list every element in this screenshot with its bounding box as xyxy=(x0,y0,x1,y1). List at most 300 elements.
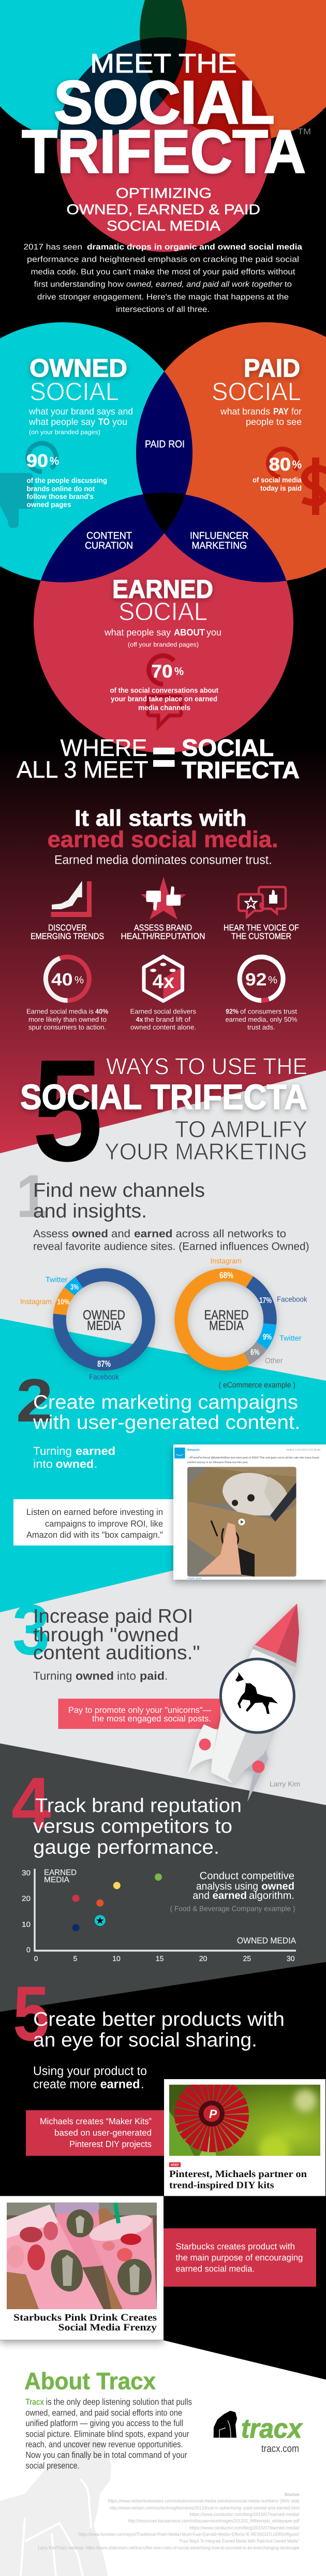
about tracx paragraph: unified platform — giving you access to the full xyxy=(25,2418,183,2428)
donut chart: owned media: OWNED xyxy=(83,1308,125,1322)
sources: https://www.conductor.com/blog/2015/07/earned-media/ xyxy=(189,2525,300,2530)
stat 90 percent: owned pages xyxy=(27,500,71,509)
callout: pay to promote unicorns: Pay to promote only your "unicorns"— xyxy=(68,1706,211,1715)
heading: it all starts with earned social media xyxy=(48,806,278,867)
caption xyxy=(226,1007,298,1031)
chart note: analysis using xyxy=(196,1881,258,1892)
photo: starbucks drinks xyxy=(7,2202,157,2309)
overlap label: influencer marketing: INFLUENCER xyxy=(190,531,248,541)
heading paid social xyxy=(212,354,301,406)
tracx logo xyxy=(214,2411,303,2455)
step 3 heading: content auditions." xyxy=(33,1642,200,1664)
tweet text: Unpin post xyxy=(187,1577,202,1580)
stat 70 percent: your brand take place on earned xyxy=(111,695,217,703)
x axis tick labels: 5 xyxy=(73,1954,78,1963)
chart note: earned xyxy=(213,1890,247,1901)
step 2 heading xyxy=(16,1367,300,1435)
heading: 5 ways to use the social trifecta: SOCIAL TRIFECTA xyxy=(20,1078,307,1117)
donut chart: owned media: MEDIA xyxy=(87,1319,121,1333)
intro paragraph: media code. But you can't make the most of your paid efforts without xyxy=(31,267,295,276)
x axis tick labels: 15 xyxy=(156,1954,164,1963)
step 2 subheading: . xyxy=(94,1457,97,1470)
donut chart: earned media: Other xyxy=(265,1357,283,1365)
donut chart: earned media: 9% xyxy=(263,1333,272,1342)
earned definition: ABOUT xyxy=(174,627,205,637)
x axis tick labels: 20 xyxy=(199,1954,207,1963)
panel: earned social xyxy=(104,575,221,726)
overlap label: influencer marketing xyxy=(190,531,248,551)
callout: listen on earned xyxy=(13,1499,173,1545)
step 3 subheading xyxy=(33,1669,168,1682)
tweet card: amazon box campaign xyxy=(173,1444,326,1580)
ring 92 percent: % xyxy=(268,975,277,986)
intro paragraph: dramatic drops in organic and owned social media xyxy=(87,242,302,251)
title xyxy=(22,49,311,186)
where all 3 meet equation: TRIFECTA xyxy=(182,756,300,783)
intro paragraph: first understanding how xyxy=(34,280,124,289)
sources: Sources xyxy=(285,2492,300,2497)
step 2 subheading: Turning xyxy=(33,1444,72,1457)
intro paragraph: intersections of all three. xyxy=(116,305,210,314)
tweet text: Amazon xyxy=(187,1448,200,1452)
rocket illustration xyxy=(188,1604,299,1802)
stat 70 percent: of the social conversations about xyxy=(110,686,218,694)
ring 40 percent xyxy=(46,957,89,1000)
caption: spur consumers to action. xyxy=(28,1023,106,1031)
photo: cat in amazon box xyxy=(187,1467,297,1577)
photo: pinterest flower: P xyxy=(209,2107,217,2121)
x axis tick labels: 30 xyxy=(287,1954,295,1963)
stat 90 percent: of the people discussing xyxy=(27,476,107,484)
step 4 heading xyxy=(11,1762,242,1858)
tracx logo: tracx xyxy=(241,2414,303,2444)
step 1 description: across all networks to xyxy=(176,1228,286,1240)
step 5 subheading: Using your product to xyxy=(33,2064,147,2078)
panel: hear the voice of the customer xyxy=(224,887,299,1031)
article headline: trend-inspired DIY kits xyxy=(169,2180,274,2191)
paid definition xyxy=(220,406,302,427)
step 5 heading: Create better products with xyxy=(33,2009,285,2030)
icon: speech bubbles xyxy=(239,887,286,917)
overlap label: content curation: CONTENT xyxy=(86,531,132,541)
axis titles xyxy=(44,1868,296,1945)
about tracx paragraph xyxy=(25,2397,192,2470)
paid definition: people to see xyxy=(246,417,302,427)
article card: starbucks pink drink xyxy=(0,2196,164,2340)
venn diagram xyxy=(0,322,326,753)
title: MEET THE xyxy=(90,49,237,79)
callout: michaels maker kits: based on user-generated xyxy=(54,2128,152,2138)
heading earned social xyxy=(112,575,213,626)
subtitle: SOCIAL MEDIA xyxy=(107,218,221,234)
overlap label: paid roi: PAID ROI xyxy=(145,439,185,450)
chart note xyxy=(170,1870,295,1913)
sources: http://www.nielsen.com/us/en/insights/news/2012/trust-in-advertising--paid-owned-and-earned.html xyxy=(110,2505,300,2510)
stat 80 percent: % xyxy=(292,458,302,471)
heading paid social: SOCIAL xyxy=(212,378,301,406)
heading owned social: SOCIAL xyxy=(30,378,119,406)
donut chart: owned media xyxy=(20,1275,149,1381)
callout: pay to promote unicorns: the most engaged social posts. xyxy=(92,1714,211,1723)
callout: starbucks: Starbucks creates product with xyxy=(176,2241,295,2251)
stat 70 percent: 70 xyxy=(151,661,173,682)
step 3 heading xyxy=(12,1590,200,1670)
caption: Earned social media is xyxy=(26,1007,94,1015)
subtitle xyxy=(66,185,260,234)
label: HEALTH/REPUTATION xyxy=(121,932,205,941)
donut chart: owned media: 3% xyxy=(70,1283,79,1292)
callout: michaels maker kits: Michaels creates “Maker Kits” xyxy=(40,2116,152,2126)
caption: 92% xyxy=(226,1007,239,1015)
step 1 description: earned xyxy=(134,1228,173,1240)
caption xyxy=(130,1007,196,1031)
step 5 heading: an eye for social sharing. xyxy=(33,2029,257,2051)
icon: thumbs down xyxy=(0,473,34,528)
stat 80 percent: today is paid xyxy=(260,484,302,492)
chart note: algorithm. xyxy=(249,1890,294,1901)
earned definition xyxy=(104,627,221,648)
step 3 subheading: . xyxy=(165,1669,168,1682)
owned definition xyxy=(28,406,133,436)
intro paragraph xyxy=(23,242,302,314)
y axis tick labels: 0 xyxy=(26,1945,31,1954)
donut chart: earned media: 17% xyxy=(259,1296,272,1305)
step 1 description xyxy=(33,1228,309,1253)
ring 40 percent: % xyxy=(75,975,84,986)
caption: trust ads. xyxy=(247,1023,275,1031)
tweet text: Verified 12-03-2016 10:32:28 AM xyxy=(286,1449,320,1452)
about tracx paragraph: Tracx xyxy=(25,2397,44,2407)
where all 3 meet equation: ALL 3 MEET xyxy=(17,756,148,783)
paid definition: for xyxy=(291,406,302,417)
x axis tick labels xyxy=(34,1954,295,1963)
step 4 heading: 4 xyxy=(11,1762,51,1843)
label: DISCOVER xyxy=(48,923,87,933)
tweet text: comfort and joy in an #Amazon Prime box this year. xyxy=(187,1461,248,1464)
title: TM xyxy=(298,127,311,136)
label: THE CUSTOMER xyxy=(231,932,291,941)
heading: 5 ways to use the social trifecta: TO AMPLIFY xyxy=(175,1116,307,1142)
label xyxy=(224,923,299,941)
heading earned social: EARNED xyxy=(112,575,213,604)
icon: speech bubble xyxy=(148,696,181,726)
article headline xyxy=(13,2312,157,2333)
callout: listen on earned: campaigns to improve ROI, like xyxy=(45,1519,163,1528)
y axis tick labels xyxy=(22,1869,31,1954)
label: brief tag xyxy=(169,2163,181,2167)
caption: the brand lift of xyxy=(144,1015,190,1023)
owned definition: you xyxy=(112,417,127,427)
donut chart: earned media: EARNED xyxy=(204,1308,248,1322)
hexagon die 4x xyxy=(144,956,182,1001)
background black section lower xyxy=(0,1962,326,2380)
icon: unicorn xyxy=(235,1672,278,1714)
caption: 4x xyxy=(136,1015,143,1023)
venn circles and overlaps xyxy=(0,322,326,753)
step 5 subheading: create more xyxy=(33,2078,97,2092)
step 3 heading: Increase paid ROI xyxy=(33,1606,193,1627)
step 5 subheading: earned xyxy=(100,2078,140,2092)
ring 40 percent: 40 xyxy=(51,970,73,990)
callout: pay to promote unicorns xyxy=(58,1699,220,1729)
step 2 subheading: owned xyxy=(56,1457,94,1470)
label: brief tag: BRIEF xyxy=(171,2164,179,2167)
callout: listen on earned: Amazon did with its "box campaign." xyxy=(26,1530,163,1540)
porthole xyxy=(220,1659,294,1733)
label: EMERGING TRENDS xyxy=(31,932,104,941)
photo: pinterest flower xyxy=(169,2085,320,2156)
intro paragraph: to xyxy=(285,280,292,289)
overlap label: influencer marketing: MARKETING xyxy=(191,540,247,551)
step 1 heading: 1 xyxy=(16,1162,49,1230)
scatter chart xyxy=(22,1868,296,1963)
icon: gorilla xyxy=(214,2411,237,2438)
ring 92 percent: 92 xyxy=(245,970,267,990)
header venn circles xyxy=(0,0,326,252)
callout: starbucks: the main purpose of encouraging xyxy=(176,2253,303,2263)
subtitle: OWNED, EARNED & PAID xyxy=(66,202,260,218)
heading owned social xyxy=(29,354,127,406)
intro paragraph: owned, earned, and paid all work together xyxy=(126,280,283,289)
owned definition: what people say xyxy=(28,417,95,427)
article headline: Starbucks Pink Drink Creates xyxy=(13,2312,157,2323)
heading: 5 ways to use the social trifecta: YOUR MARKETING xyxy=(105,1138,307,1165)
earned definition: (off your branded pages) xyxy=(128,641,199,648)
donut chart: earned media: 68% xyxy=(219,1270,233,1280)
amazon logo xyxy=(174,1448,185,1458)
label: ASSESS BRAND xyxy=(134,923,192,933)
step 1 description: reveal favorite audience sites. (Earned influences Owned) xyxy=(33,1240,309,1253)
donut chart: earned media: Instagram xyxy=(210,1257,242,1266)
step 2 heading: Create marketing campaigns xyxy=(33,1392,298,1413)
article card: pinterest michaels xyxy=(164,2079,325,2196)
donut chart: earned media xyxy=(181,1257,307,1365)
chart note: owned xyxy=(261,1881,294,1892)
heading owned social: OWNED xyxy=(29,354,127,382)
background dark section xyxy=(0,1743,326,2012)
owned definition: what your brand says and xyxy=(28,406,133,417)
70 percent ring xyxy=(149,656,174,684)
step 3 heading: through "owned xyxy=(33,1624,179,1646)
data points xyxy=(72,1873,162,1931)
donut chart: owned media: Twitter xyxy=(46,1276,68,1284)
axis titles: MEDIA xyxy=(44,1876,70,1884)
where all 3 meet equation: SOCIAL xyxy=(182,734,274,761)
heading: 5 ways to use the social trifecta: WAYS TO USE THE xyxy=(106,1053,307,1080)
about tracx paragraph: reach, and uncover new revenue opportunities. xyxy=(25,2439,183,2449)
chart note: Conduct competitive xyxy=(200,1870,294,1882)
paid definition: what brands xyxy=(220,406,270,417)
heading earned social: SOCIAL xyxy=(118,598,208,626)
caption: earned media, only 50% xyxy=(226,1015,298,1023)
step 1 description: owned xyxy=(72,1228,108,1240)
donut chart: owned media: Facebook xyxy=(89,1373,120,1381)
step 5 heading xyxy=(13,1970,285,2057)
step 1 heading xyxy=(16,1162,205,1230)
caption: 40% xyxy=(95,1007,109,1015)
heading: it all starts with earned social media: It all starts with xyxy=(75,806,246,831)
sources xyxy=(38,2492,300,2550)
step 5 subheading xyxy=(33,2064,147,2092)
caption: more likely than owned to xyxy=(28,1015,107,1023)
background teal section xyxy=(0,1319,326,1612)
x axis tick labels: 0 xyxy=(34,1954,38,1963)
step 1 heading: and insights. xyxy=(33,1200,147,1222)
caption xyxy=(26,1007,109,1031)
ring 92 percent xyxy=(240,957,283,1000)
stat 90 percent: 90 xyxy=(26,451,48,471)
step 3 subheading: into xyxy=(117,1669,136,1682)
fin dots xyxy=(199,1739,211,1750)
callout: listen on earned: Listen on earned before investing in xyxy=(26,1507,163,1517)
step 5 subheading: . xyxy=(141,2078,144,2092)
credit: larry kim: Larry Kim xyxy=(270,1780,300,1788)
where all 3 meet equation xyxy=(17,734,300,783)
donut chart: earned media: Facebook xyxy=(277,1295,307,1304)
panel: owned social xyxy=(0,354,133,528)
article headline: Pinterest, Michaels partner on xyxy=(169,2169,307,2180)
earned definition: you xyxy=(206,627,221,637)
sources: https://www.networknewswire.com/solutions/social-media-solutions/social-media-numbers/ (96% stat) xyxy=(108,2498,299,2503)
callout: starbucks: earned social media. xyxy=(176,2264,255,2273)
axis titles: OWNED MEDIA xyxy=(237,1936,296,1945)
overlap label: content curation: CURATION xyxy=(85,540,133,551)
step 2 subheading: earned xyxy=(76,1444,115,1457)
gorilla watermark xyxy=(0,2437,111,2576)
step 3 subheading: Turning xyxy=(33,1669,72,1682)
sources: "Four Ways To Integrate Earned Media With Paid And Owned Media" xyxy=(179,2539,299,2544)
step 3 subheading: paid xyxy=(140,1669,165,1682)
step 3 subheading: owned xyxy=(76,1669,114,1682)
stat 70 percent xyxy=(110,661,218,712)
where all 3 meet equation: WHERE xyxy=(60,734,147,761)
stat 70 percent: media channels xyxy=(138,704,190,712)
stat 80 percent: of social media xyxy=(253,476,302,484)
heading: it all starts with earned social media: earned social media. xyxy=(48,827,278,852)
big numeral 5: 5 xyxy=(32,1030,103,1192)
step 4 heading: Track brand reputation xyxy=(35,1795,242,1816)
about tracx paragraph: social presence. xyxy=(25,2460,80,2470)
tracx logo: tracx.com xyxy=(261,2443,299,2455)
panel: paid social xyxy=(212,354,326,515)
x axis tick labels: 10 xyxy=(112,1954,121,1963)
about tracx paragraph: Now you can finally be in total command of your xyxy=(25,2450,187,2460)
article headline xyxy=(169,2169,307,2191)
chart note: and xyxy=(192,1890,210,1901)
step 2 heading: 2 xyxy=(16,1367,53,1435)
heading: it all starts with earned social media: Earned media dominates consumer trust. xyxy=(54,853,272,867)
about tracx paragraph: social picture. Eliminate blind spots, expand your xyxy=(25,2429,189,2439)
step 2 heading: with user-generated content. xyxy=(33,1412,300,1434)
sources: https://www.forrester.com/report/Traditional+Paid+Media+Must+Fuel+Earned+Media+Efforts/-/E-RES60337LUDRG#figure2 xyxy=(79,2532,300,2537)
heading: 5 ways to use the social trifecta xyxy=(20,1030,307,1192)
owned definition: (on your branded pages) xyxy=(29,428,100,436)
intro paragraph: drive stronger engagement. Here's the magic that happens at the xyxy=(37,293,289,302)
90 percent ring xyxy=(28,443,56,471)
title: TRIFECTA xyxy=(22,118,306,186)
article headline: Social Media Frenzy xyxy=(58,2322,157,2333)
background gradient maroon section xyxy=(0,746,326,1161)
about tracx paragraph: is the only deep listening solution that pulls xyxy=(46,2397,192,2407)
step 5 heading: 5 xyxy=(13,1970,50,2057)
sources: https://www.conductor.com/blog/2015/07/earned-media/ xyxy=(189,2512,300,2517)
icon: dollar sign xyxy=(303,457,326,515)
80 percent ring xyxy=(268,449,297,477)
icon: star with thumbs xyxy=(141,877,186,920)
earned definition: what people say xyxy=(104,627,171,637)
step 2 subheading: into xyxy=(33,1457,53,1470)
stat 80 percent xyxy=(253,454,302,492)
tweet text: ...#PrimePet friend @butterfoldhas won best post of 2016! This one goes out to all the cats who have found xyxy=(187,1456,319,1459)
subtitle: OPTIMIZING xyxy=(116,185,212,201)
icon: trend chart xyxy=(51,881,92,917)
overlap label: content curation xyxy=(85,531,133,551)
intro paragraph: performance and heightened emphasis on cracking the paid social xyxy=(27,255,299,264)
icon: thumb in bubble xyxy=(269,890,277,904)
paid definition: PAY xyxy=(273,406,289,417)
callout: michaels maker kits: Pinterest DIY projects xyxy=(69,2139,152,2149)
step 1 description: Assess xyxy=(33,1228,69,1240)
tweet text xyxy=(187,1448,320,1580)
step 4 heading: versus competitors to xyxy=(33,1815,232,1837)
ecommerce example note: ( eCommerce example ) xyxy=(219,1381,295,1390)
axis titles: EARNED xyxy=(44,1868,77,1877)
donut chart: earned media: MEDIA xyxy=(209,1319,244,1333)
panel: discover emerging trends xyxy=(26,881,109,1031)
step 1 description: and xyxy=(111,1228,130,1240)
step 2 subheading xyxy=(33,1444,115,1470)
donut chart: owned media: Instagram xyxy=(20,1298,52,1306)
step 4 heading: gauge performance. xyxy=(33,1837,219,1858)
y axis tick labels: 30 xyxy=(22,1869,31,1877)
donut chart: owned media: 87% xyxy=(97,1359,111,1369)
caption: Earned social delivers xyxy=(130,1007,196,1015)
sources: Larry Kim/Tracx webinar: https://www.slideshare.net/tracx/the-new-rules-of-social-advertising-how-to-succeed-in-an-everchanging-landscape xyxy=(38,2545,299,2550)
callout: michaels maker kits xyxy=(26,2110,164,2156)
caption: owned content alone. xyxy=(130,1023,196,1031)
about tracx heading: About Tracx xyxy=(24,2368,156,2395)
background light gray section lower xyxy=(0,1534,326,1808)
about tracx paragraph: owned, earned, and paid social efforts into one xyxy=(25,2408,182,2417)
label xyxy=(121,923,205,941)
label xyxy=(31,923,104,941)
panel: assess brand health xyxy=(121,877,205,1031)
label: HEAR THE VOICE OF xyxy=(224,923,299,933)
title: SOCIAL xyxy=(54,68,275,137)
stat 90 percent xyxy=(26,451,107,509)
stat 70 percent: % xyxy=(174,665,184,678)
y axis tick labels: 10 xyxy=(22,1920,31,1928)
chart note: ( Food & Beverage Company example ) xyxy=(170,1905,295,1913)
axes xyxy=(35,1869,296,1951)
donut chart: earned media: Twitter xyxy=(279,1335,302,1343)
stat 90 percent: brands online do not xyxy=(27,484,95,493)
sources: http://resources.bazaarvoice.com/rs/bazaarvoice/images/201202_Millennials_whitepaper.pdf xyxy=(128,2518,300,2524)
owned definition: TO xyxy=(98,417,110,427)
x axis tick labels: 25 xyxy=(243,1954,251,1963)
stat 90 percent: follow those brand's xyxy=(27,492,94,500)
heading paid social: PAID xyxy=(244,354,300,382)
stat 90 percent: % xyxy=(50,454,59,467)
callout: starbucks xyxy=(164,2228,316,2287)
donut chart: earned media: 6% xyxy=(250,1348,259,1357)
hexagon die 4x: 4x xyxy=(152,971,174,993)
step 1 heading: Find new channels xyxy=(33,1180,205,1201)
rocket body and fins xyxy=(188,1604,299,1802)
step 3 heading: 3 xyxy=(12,1590,50,1670)
background white footer xyxy=(0,2340,326,2576)
caption: of consumers trust xyxy=(240,1007,297,1015)
